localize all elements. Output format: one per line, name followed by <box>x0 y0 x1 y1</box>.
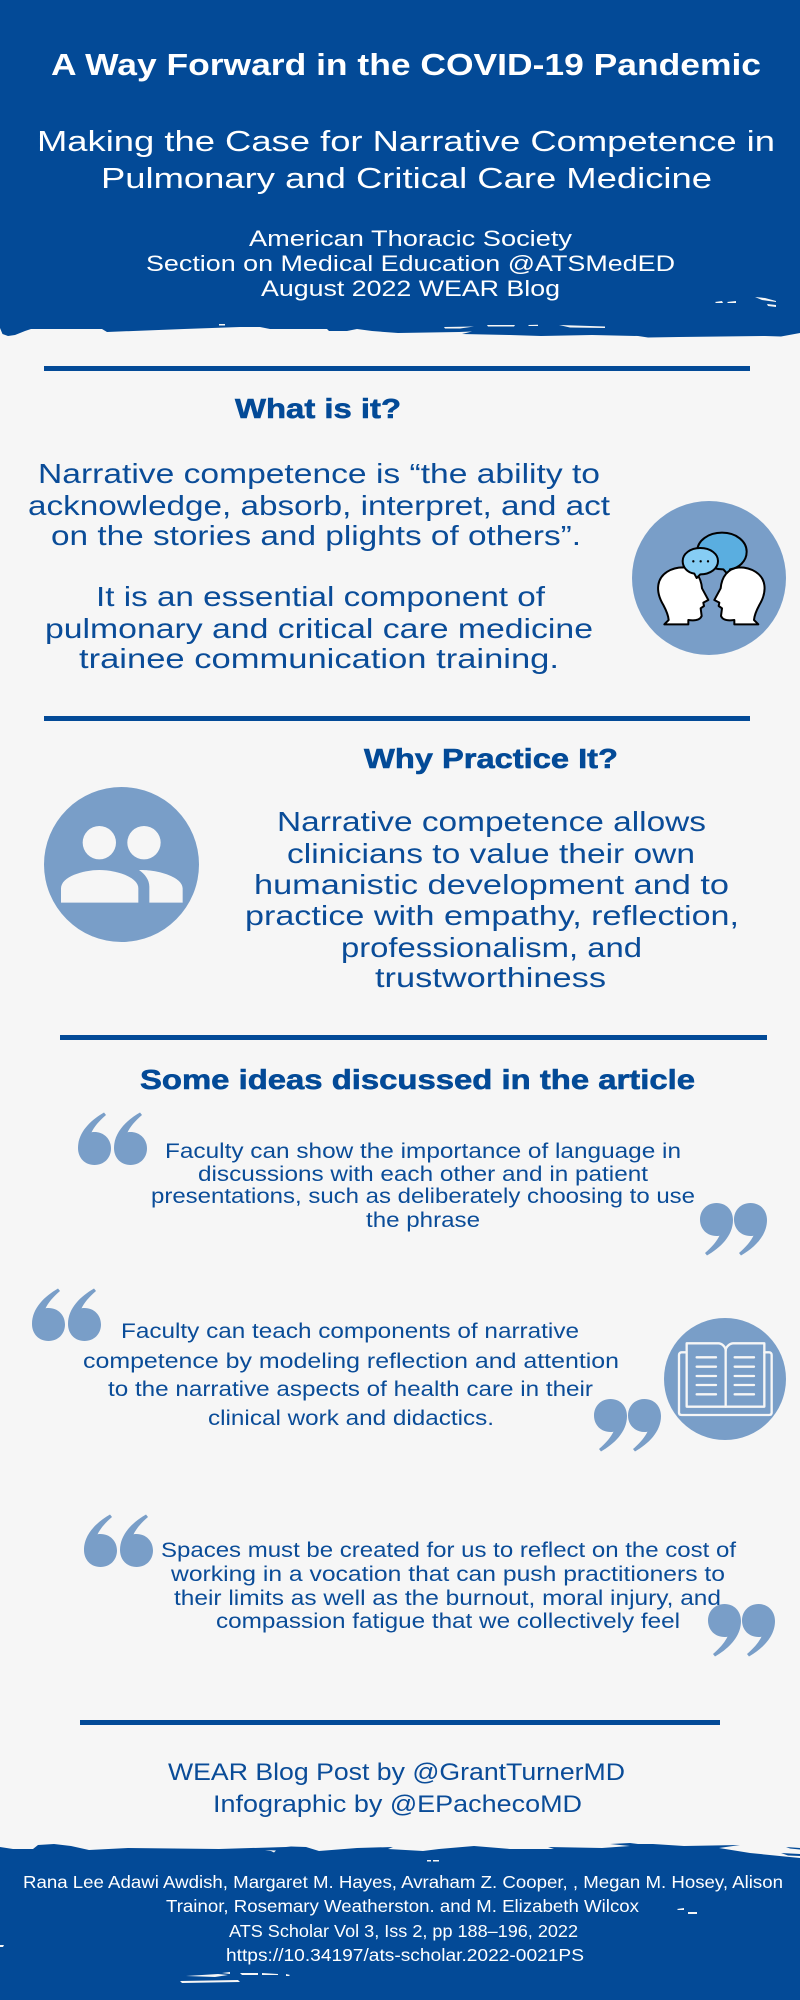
quote text: the phrase <box>366 1209 480 1232</box>
heading: why practice it: Why Practice It? <box>364 743 618 774</box>
quote text: their limits as well as the burnout, moral injury, and <box>174 1587 721 1610</box>
definition text <box>28 458 610 674</box>
quote text: Faculty can teach components of narrative <box>121 1320 579 1343</box>
icon: closing quote <box>594 1399 661 1452</box>
quote text: Faculty can show the importance of language in <box>165 1140 681 1163</box>
definition text: on the stories and plights of others”. <box>51 520 581 551</box>
quote text: working in a vocation that can push practitioners to <box>170 1563 725 1586</box>
blue brush specks <box>781 1847 800 1856</box>
title: A Way Forward in the COVID-19 Pandemic <box>51 47 761 82</box>
brush streaks <box>0 1850 697 1983</box>
citation text: Trainor, Rosemary Weatherston. and M. Elizabeth Wilcox <box>166 1896 639 1916</box>
citation text: ATS Scholar Vol 3, Iss 2, pp 188–196, 2022 <box>229 1921 578 1941</box>
subtitle <box>37 126 775 195</box>
definition text: It is an essential component of <box>96 581 545 612</box>
citation text: https://10.34197/ats-scholar.2022-0021PS <box>226 1945 584 1965</box>
icon: closing quote <box>708 1604 775 1656</box>
footer brush background <box>0 1843 800 2000</box>
explanation text <box>245 806 739 993</box>
quote text: competence by modeling reflection and attention <box>83 1350 619 1373</box>
citation text <box>23 1872 783 1965</box>
quote two <box>32 1288 786 1452</box>
banner brush background <box>0 0 800 338</box>
quote text: discussions with each other and in patient <box>198 1163 648 1186</box>
definition text: trainee communication training. <box>79 643 559 674</box>
quote text: to the narrative aspects of health care in their <box>108 1378 593 1401</box>
definition text: Narrative competence is “the ability to <box>38 458 600 489</box>
quote text: Spaces must be created for us to reflect on the cost of <box>161 1539 736 1562</box>
panel: why practice it <box>44 743 739 993</box>
icon: closing quote <box>700 1203 767 1256</box>
quote text <box>161 1539 736 1633</box>
explanation text: clinicians to value their own <box>287 838 695 869</box>
credits: Infographic by @EPachecoMD <box>213 1791 582 1818</box>
quote text: compassion fatigue that we collectively feel <box>216 1610 680 1633</box>
credits <box>168 1759 625 1818</box>
icon: two heads talking <box>632 501 786 655</box>
panel: header banner <box>0 0 800 338</box>
icon: opening quote <box>84 1514 153 1567</box>
quote text <box>83 1320 619 1430</box>
organisation credit: American Thoracic Society <box>249 226 572 251</box>
icon: opening quote <box>78 1112 147 1165</box>
panel: footer banner <box>0 1843 800 2000</box>
quote text <box>151 1140 695 1232</box>
explanation text: trustworthiness <box>375 962 606 993</box>
subtitle: Making the Case for Narrative Competence in <box>37 126 775 158</box>
definition text: pulmonary and critical care medicine <box>45 613 593 644</box>
quote text: presentations, such as deliberately choosing to use <box>151 1185 695 1208</box>
organisation credit: August 2022 WEAR Blog <box>261 276 560 301</box>
explanation text: humanistic development and to <box>254 869 729 900</box>
quote text: clinical work and didactics. <box>208 1407 494 1430</box>
credits: WEAR Blog Post by @GrantTurnerMD <box>168 1759 625 1786</box>
citation text: Rana Lee Adawi Awdish, Margaret M. Hayes, Avraham Z. Cooper, , Megan M. Hosey, Alison <box>23 1872 783 1892</box>
brush streaks <box>219 297 776 328</box>
quote three <box>84 1514 775 1656</box>
explanation text: Narrative competence allows <box>277 806 706 837</box>
icon: people <box>44 787 199 942</box>
icon: open book <box>664 1318 786 1440</box>
explanation text: professionalism, and <box>341 932 642 963</box>
organisation credit: Section on Medical Education @ATSMedED <box>146 251 675 276</box>
quote one <box>78 1112 767 1256</box>
panel: what is it <box>28 393 786 674</box>
icon: opening quote <box>32 1288 101 1341</box>
organisation credit <box>146 226 675 301</box>
definition text: acknowledge, absorb, interpret, and act <box>28 490 610 521</box>
heading: what is it: What is it? <box>235 393 401 424</box>
explanation text: practice with empathy, reflection, <box>245 900 739 931</box>
subtitle: Pulmonary and Critical Care Medicine <box>101 163 712 195</box>
panel: ideas from the article <box>32 1064 786 1656</box>
heading: some ideas: Some ideas discussed in the article <box>140 1064 695 1095</box>
